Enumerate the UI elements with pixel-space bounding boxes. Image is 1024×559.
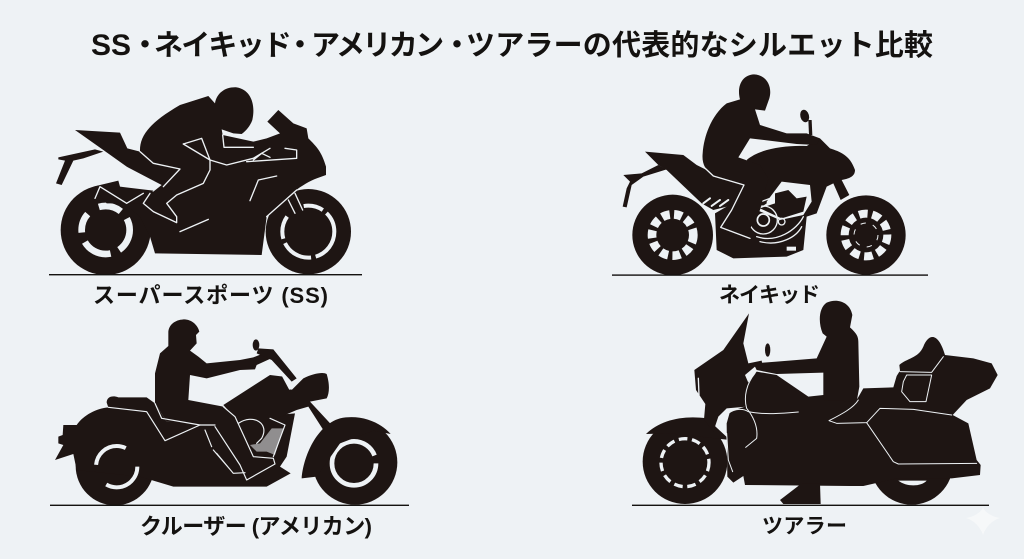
panel: super sport silhouette (56, 87, 351, 275)
boot (780, 483, 821, 504)
title: ツアラーの代表的なシルエット比較 (466, 29, 933, 62)
rear wheel (870, 422, 953, 505)
rear wheel (61, 185, 151, 275)
panel: cruiser silhouette (55, 319, 397, 505)
mirror (799, 109, 812, 135)
ground line: super sport (49, 274, 362, 275)
tank (223, 373, 332, 430)
tail tip (623, 165, 667, 207)
label: cruiser: クルーザー (アメリカン) (140, 514, 372, 539)
engine gaps (757, 182, 812, 220)
front wheel (266, 189, 351, 274)
body, saddlebag and top case (727, 337, 998, 486)
front fender (646, 417, 730, 440)
label: super sport: スーパースポーツ (SS) (93, 283, 328, 308)
outlines (698, 357, 977, 472)
rider (753, 301, 859, 402)
ground line: cruiser (50, 505, 409, 506)
engine detail (703, 190, 807, 251)
front wheel (643, 419, 727, 504)
tank and headlight (715, 138, 855, 258)
front fender (302, 417, 391, 478)
bike and rider body (75, 87, 326, 255)
rider (155, 319, 275, 480)
front wheel (826, 195, 906, 275)
tail tip (56, 149, 103, 185)
title: ・ (130, 30, 160, 62)
rear fender and body (55, 396, 295, 487)
seat and tail (645, 152, 743, 210)
rider outlines (95, 135, 303, 232)
title: SS (91, 29, 131, 62)
rider outline (702, 165, 750, 238)
rear wheel rim (96, 446, 137, 487)
panel: tourer silhouette (643, 301, 998, 505)
title: アメリカン (311, 30, 443, 62)
title: ネイキッド (154, 30, 290, 62)
mirror (765, 343, 770, 357)
outlines (108, 357, 315, 480)
icon: sparkle watermark (966, 507, 1000, 535)
ground line: naked (612, 274, 928, 276)
rear wheel (632, 195, 713, 275)
rear wheel (76, 427, 154, 505)
rider (702, 74, 820, 239)
ground line: tourer (632, 505, 989, 506)
front wheel (313, 420, 397, 505)
label: naked: ネイキッド (719, 284, 820, 307)
label: tourer: ツアラー (762, 515, 847, 538)
title: ・ (286, 30, 315, 62)
fairing and windshield (694, 313, 763, 432)
mirror and handlebar (253, 339, 297, 382)
panel: naked silhouette (623, 74, 906, 275)
title: ・ (442, 30, 472, 62)
rear fender (93, 181, 153, 203)
